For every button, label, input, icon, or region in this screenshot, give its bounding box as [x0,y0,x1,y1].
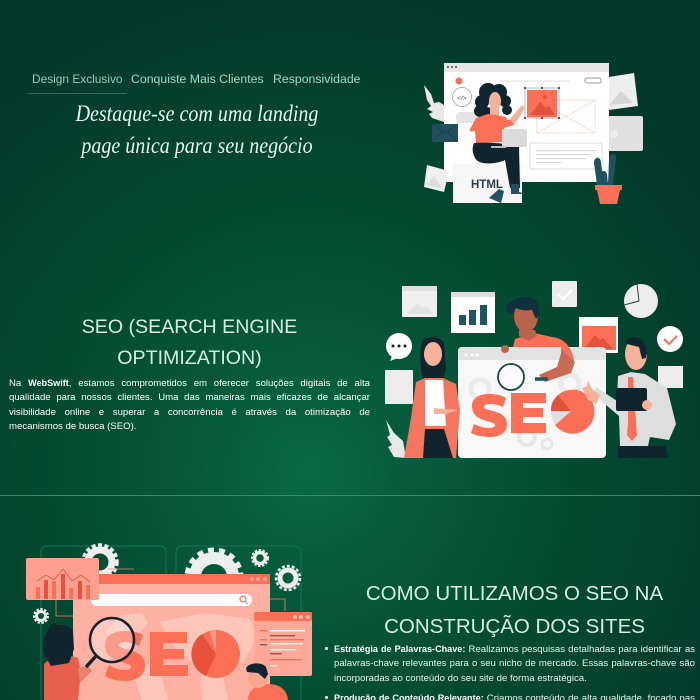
feature tabs [28,72,361,94]
side panel [254,612,312,676]
browser window [444,63,609,182]
heading: como utilizamos: COMO UTILIZAMOS O SEO NA [366,582,663,605]
heading: SEO [82,316,297,369]
outlined back cards [41,546,301,700]
man with magnifier [498,297,575,390]
browser window [73,574,270,700]
illustration: SEO team [385,281,683,458]
illustration: SEO website [26,545,312,700]
woman left [404,337,460,458]
man right [582,337,676,458]
gears [34,545,300,623]
tagline: page única para seu negócio [81,132,313,158]
pie wedges [551,395,571,425]
tab: Conquiste Mais Clientes: Conquiste Mais Clientes [131,72,264,86]
man [246,663,288,700]
woman [469,83,527,203]
wireframe [537,100,595,133]
image card [579,317,618,353]
heading: como utilizamos [366,582,664,638]
text: SEO intro [9,378,370,432]
envelope [432,124,458,142]
SEO letters [471,390,594,437]
bar chart card [451,292,495,333]
text: SEO intro: visibilidade online e superar a concorrência é através da otimização de [9,407,370,418]
SEO board [458,347,606,458]
heading: SEO: SEO (SEARCH ENGINE [82,316,297,338]
pie card [385,370,413,404]
text: SEO intro: qualidade para nossos clientes. Uma das maneiras mais eficazes de alcançar [9,392,370,403]
woman [43,623,92,700]
world map [106,613,258,700]
tagline: Destaque-se com uma landing [76,101,318,126]
bullet list [325,644,695,700]
dots bubble [386,333,412,361]
tagline [75,101,318,158]
grey button [456,112,480,123]
check bubble [657,326,683,352]
leaf plant [424,85,444,122]
bullet: palavras-chave [325,644,695,684]
cactus pot [594,154,622,204]
image frame [524,87,560,119]
section divider [0,495,700,496]
check card [552,281,577,307]
small right card [658,366,683,388]
photo card [402,286,437,317]
bullet: palavras-chave: Estratégia de Palavras-Chave: Realizamos pesquisas detalhadas para identificar as [334,644,695,655]
search bar [91,594,252,606]
bullet: palavras-chave: palavras-chave relevantes para o seu nicho de mercado. Essas palavras-chave são [334,658,695,669]
active tab underline [28,93,127,94]
HTML box [453,164,522,203]
code bubble [452,88,472,106]
small photo [424,165,449,192]
tab: Responsividade: Responsividade [273,72,361,86]
bullet: palavras-chave: incorporadas ao conteúdo do seu site de forma estratégica. [334,673,587,684]
text: SEO intro: mecanismos de busca (SEO). [9,421,136,432]
heading: SEO: OPTIMIZATION) [117,347,262,369]
text box [530,143,602,169]
tab: Design Exclusivo: Design Exclusivo [32,72,123,86]
heading: como utilizamos: CONSTRUÇÃO DOS SITES [384,615,645,638]
SEO letters [105,631,188,681]
back photo card [609,73,638,110]
text: SEO intro: Na WebSwift, estamos comprometidos em oferecer soluções digitais de alta [9,378,370,389]
connector lines [56,569,285,616]
illustration: landing page designer [424,63,643,204]
video card [604,116,643,151]
magnifier [86,618,134,667]
pie icon [624,284,658,318]
chart card [26,558,99,600]
HTML box: HTML [471,179,503,191]
code bubble: </> [457,95,467,102]
leaf [386,420,406,458]
pie chart [191,630,240,678]
